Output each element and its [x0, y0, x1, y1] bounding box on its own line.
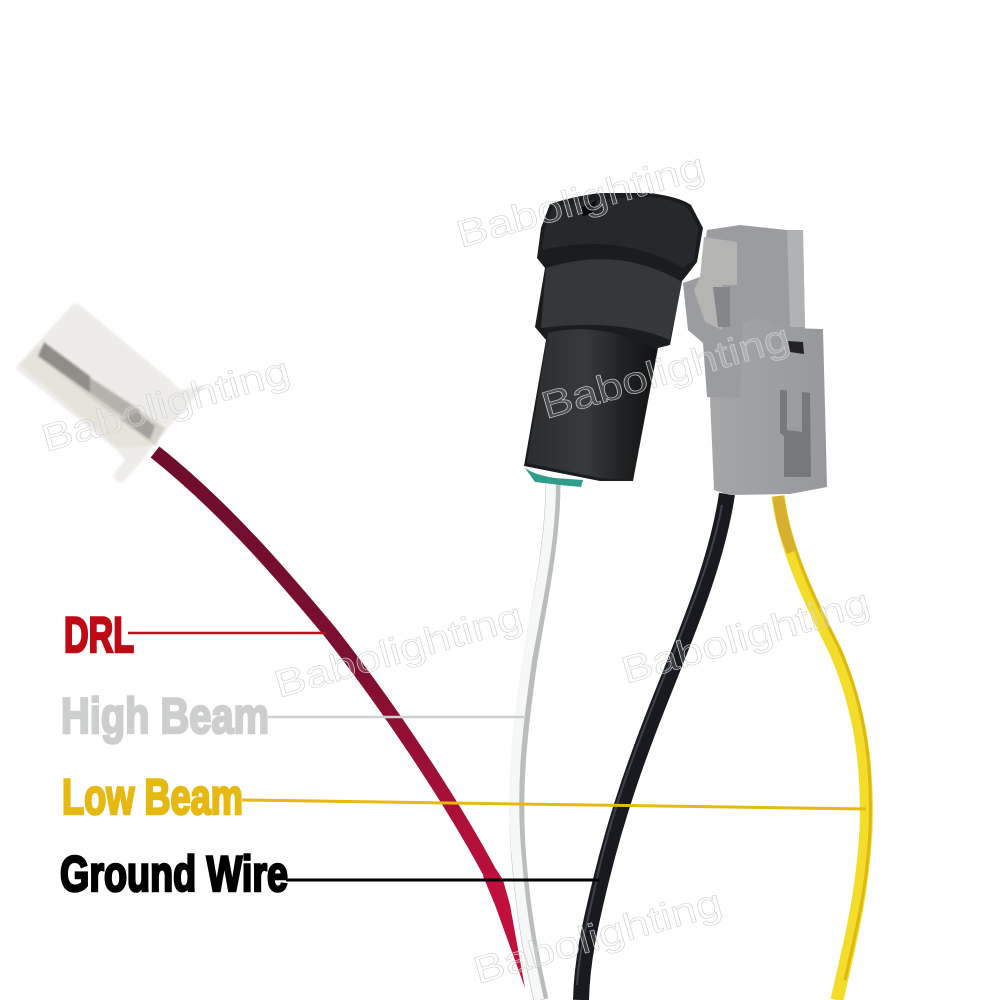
label: DRL: DRL [64, 607, 134, 663]
watermarks [37, 146, 875, 993]
wire: black ground [577, 494, 727, 1000]
label: High Beam: High Beam [61, 688, 269, 744]
wire: white high beam [514, 484, 553, 1000]
label: Ground Wire: Ground Wire [60, 846, 288, 902]
watermark: mid left: Babolighting [270, 596, 528, 707]
leader line: Ground Wire [286, 878, 599, 882]
wire: red DRL [155, 452, 525, 988]
watermark: plug left: Babolighting [37, 350, 295, 461]
wire: yellow low beam [778, 496, 870, 1000]
grey plug: rear light edge [787, 230, 805, 327]
grey plug: rear housing [683, 225, 805, 400]
grey plug: latch [694, 237, 737, 330]
connector: grey low beam plug [683, 225, 827, 495]
watermark: centre connector: Babolighting [537, 317, 795, 428]
black plug: middle body [541, 259, 682, 340]
watermark: bottom: Babolighting [469, 882, 727, 993]
watermark: mid right: Babolighting [617, 582, 875, 693]
leader line: Low Beam [242, 800, 866, 809]
grey plug: latch post [713, 287, 730, 327]
grey plug: slot [780, 390, 811, 477]
black plug: silhouette [524, 193, 703, 481]
connector: clear DRL plug [15, 304, 205, 482]
black plug: keyway notch [581, 200, 597, 216]
black plug: green seal [525, 468, 583, 487]
black plug: top collar [542, 197, 698, 268]
watermark: top: Babolighting [452, 146, 710, 257]
black plug: lower body [527, 329, 657, 480]
leader line: DRL [128, 632, 326, 634]
connector: black high beam plug [524, 193, 703, 487]
grey plug: lock window [788, 341, 804, 354]
grey plug: front housing [710, 318, 827, 495]
leader line: High Beam [268, 716, 526, 718]
label: Low Beam: Low Beam [62, 769, 243, 825]
